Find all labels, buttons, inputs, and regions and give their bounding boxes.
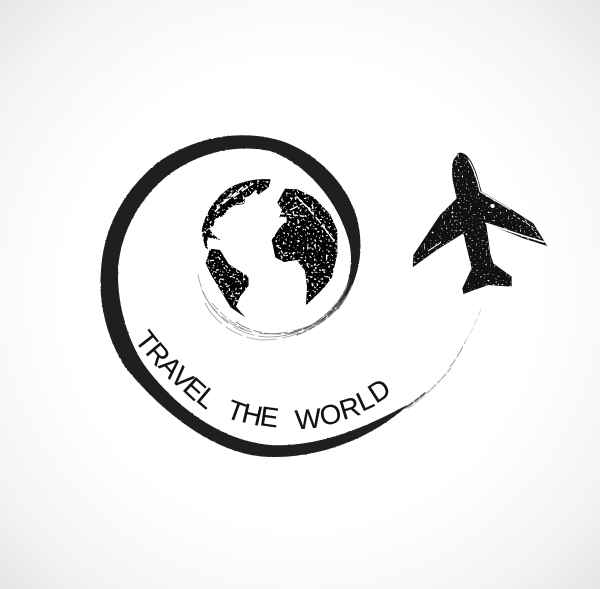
- globe: [202, 179, 337, 317]
- curved caption: TRAVEL THE WORLD: TRAVEL THE WORLD: [129, 325, 396, 435]
- spiral fading inner strokes around globe: [198, 275, 352, 340]
- spiral main band: [100, 135, 407, 457]
- brush spiral: [100, 135, 482, 457]
- airplane highlights: [428, 155, 544, 253]
- airplane: [413, 153, 547, 294]
- africa and eurasia: [272, 189, 337, 305]
- south america: [206, 249, 249, 317]
- central america: [202, 229, 221, 249]
- spiral fading tail toward plane: [405, 306, 482, 408]
- north america: [202, 179, 271, 233]
- globe highlights: [210, 183, 336, 300]
